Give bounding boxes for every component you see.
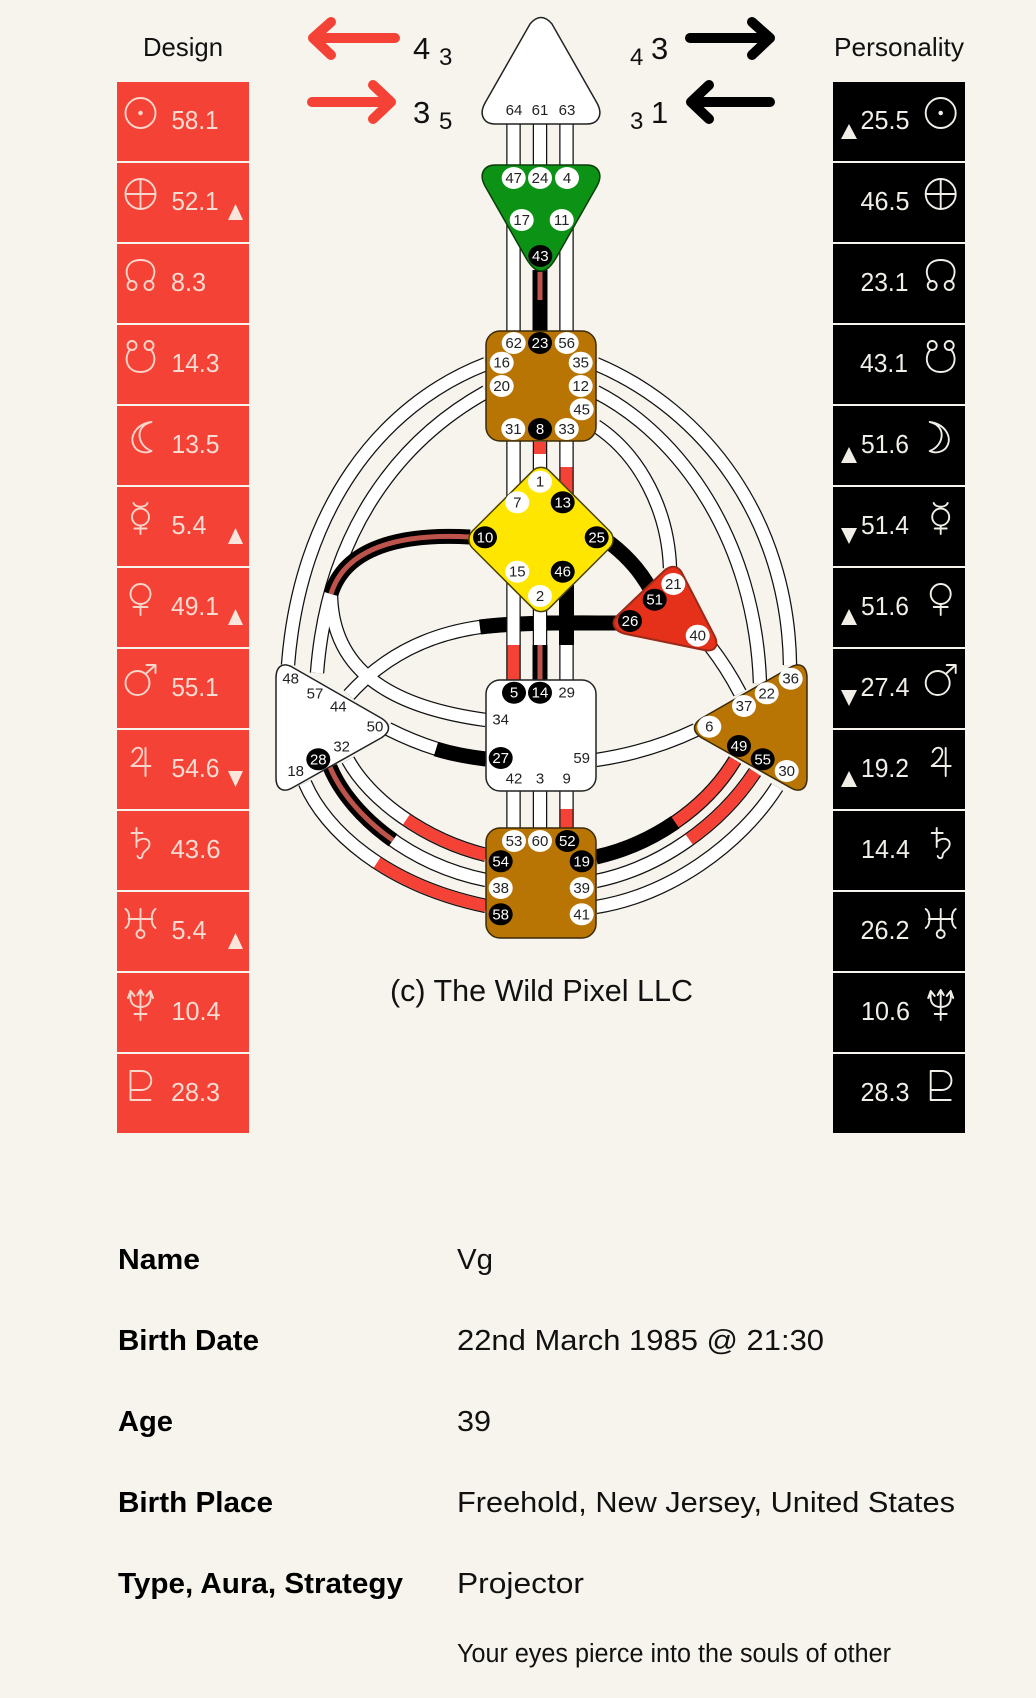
center: spleen: 32 — [333, 739, 350, 756]
center: sacral: 9 — [563, 770, 571, 787]
center: head: 63 — [559, 102, 575, 119]
center: g diamond: 10 — [477, 529, 493, 546]
row: personality sun — [833, 82, 965, 161]
variable numbers: design bottom: 3 — [413, 95, 430, 130]
heading: Personality: Personality — [834, 32, 964, 62]
description text: Your eyes pierce into the souls of other — [457, 1640, 891, 1668]
center: root: 41 — [573, 906, 590, 923]
row: personality mercury: 51.4 — [861, 510, 909, 540]
row: design jupiter: 54.6 — [172, 753, 220, 783]
row: design sun: 58.1 — [172, 105, 218, 135]
row: personality earth — [833, 163, 965, 242]
center: sacral: 5 — [510, 685, 518, 702]
row: design saturn: 43.6 — [170, 834, 220, 864]
center: g diamond — [464, 462, 618, 617]
center: g diamond: 25 — [588, 529, 605, 546]
center: g diamond: 1 — [536, 474, 544, 491]
center: heart: 40 — [689, 628, 706, 645]
row: design venus — [117, 568, 249, 647]
row: personality sun: 25.5 — [860, 105, 910, 135]
panel: design column — [117, 82, 249, 1133]
center: root — [486, 828, 596, 938]
row: design uranus: 5.4 — [172, 915, 206, 945]
row: personality venus: 51.6 — [861, 591, 909, 621]
variable numbers: design top: 4 — [413, 31, 430, 66]
row: design north node: 8.3 — [171, 267, 206, 297]
center: ajna: 11 — [554, 212, 569, 229]
row: age: Age — [118, 1406, 173, 1438]
variable numbers: personality bottom — [630, 95, 668, 135]
center: solar plexus: 22 — [758, 685, 775, 702]
row: birth place: Freehold, New Jersey, United States — [457, 1487, 955, 1519]
center: solar plexus: 37 — [736, 698, 752, 715]
row: personality moon — [833, 406, 965, 485]
row: personality south node: 43.1 — [860, 348, 908, 378]
horizontal black at channel 46 crossing — [547, 616, 610, 630]
channel 43-23 black and red — [532, 270, 548, 331]
center: sacral — [486, 680, 596, 791]
row: birth date — [118, 1325, 824, 1357]
row: design earth — [117, 163, 249, 242]
center: ajna: 43 — [532, 248, 549, 265]
center: solar plexus: 30 — [778, 763, 795, 780]
channel 9-52 red segment — [560, 809, 572, 828]
channel 15-5 red segment — [508, 645, 520, 680]
row: design earth: 52.1 — [172, 186, 218, 216]
center: throat — [486, 331, 596, 441]
row: design mercury — [117, 487, 249, 566]
channel 33-13 red segment — [560, 467, 572, 495]
copyright caption: (c) The Wild Pixel LLC — [390, 973, 693, 1008]
channel 18-58 red segment — [305, 783, 486, 906]
row: personality saturn: 14.4 — [861, 834, 910, 864]
row: design pluto: 28.3 — [171, 1077, 220, 1107]
details table — [118, 1244, 955, 1668]
center: solar plexus: 55 — [754, 751, 771, 768]
row: design moon: 13.5 — [172, 429, 220, 459]
center: root: 60 — [532, 833, 548, 850]
center: throat: 20 — [493, 378, 510, 395]
row: design jupiter — [117, 730, 249, 809]
row: name: Name — [118, 1244, 200, 1276]
center: throat: 16 — [493, 355, 510, 372]
center: spleen: 48 — [282, 671, 299, 688]
center: g diamond: 13 — [554, 494, 571, 511]
center: spleen: 28 — [310, 751, 327, 768]
center: sacral: 34 — [492, 711, 509, 728]
center: ajna — [482, 165, 600, 271]
channel 8-1 red segment — [534, 442, 546, 454]
channel 19-49 black and red — [596, 760, 735, 857]
variable numbers: design top: 3 — [439, 44, 452, 71]
variable numbers: personality top: 3 — [651, 31, 668, 66]
variable numbers: design bottom: 5 — [439, 108, 452, 135]
variable numbers: design top — [413, 31, 452, 71]
center: throat: 23 — [532, 335, 548, 352]
panel: personality column — [833, 82, 965, 1133]
center: head: 64 — [506, 102, 522, 119]
variable numbers: personality top: 4 — [630, 44, 643, 71]
row: age — [118, 1406, 491, 1438]
row: age: 39 — [457, 1406, 491, 1438]
row: design saturn — [117, 811, 249, 890]
row: design pluto — [117, 1054, 249, 1133]
row: name — [118, 1244, 493, 1276]
center: solar plexus — [694, 665, 807, 790]
row: personality pluto: 28.3 — [860, 1077, 910, 1107]
row: personality venus — [833, 568, 965, 647]
row: design moon — [117, 406, 249, 485]
center: throat: 56 — [558, 335, 575, 352]
center: heart: 21 — [665, 576, 682, 593]
center: root: 19 — [573, 853, 590, 870]
variable numbers: design bottom — [413, 95, 452, 135]
center: sacral: 29 — [558, 685, 575, 702]
row: type aura strategy: Type, Aura, Strategy — [118, 1568, 403, 1600]
heading: Design: Design — [143, 32, 223, 62]
center: root: 52 — [559, 833, 576, 850]
center: sacral: 42 — [506, 770, 522, 787]
row: type aura strategy — [118, 1568, 584, 1600]
center: spleen — [276, 665, 388, 790]
center: solar plexus: 49 — [731, 738, 747, 755]
center: sacral: 3 — [536, 770, 544, 787]
channel 2-14 black and red — [532, 645, 548, 680]
row: personality south node — [833, 325, 965, 404]
center: ajna: 4 — [563, 170, 571, 187]
row: personality neptune — [833, 973, 965, 1052]
center: throat: 33 — [558, 421, 575, 438]
row: personality mars — [833, 649, 965, 728]
row: design mercury: 5.4 — [172, 510, 206, 540]
row: birth place: Birth Place — [118, 1487, 273, 1519]
variable numbers: personality top — [630, 31, 668, 71]
row: design venus: 49.1 — [171, 591, 219, 621]
row: personality neptune: 10.6 — [861, 996, 910, 1026]
row: personality uranus — [833, 892, 965, 971]
row: personality jupiter — [833, 730, 965, 809]
row: design neptune — [117, 973, 249, 1052]
row: personality moon: 51.6 — [861, 429, 909, 459]
curved channel fills — [288, 364, 790, 907]
center: ajna: 17 — [513, 212, 530, 229]
row: design mars: 55.1 — [172, 672, 218, 702]
center: root: 38 — [492, 880, 509, 897]
center: head — [482, 18, 600, 124]
center: g diamond: 2 — [536, 588, 544, 605]
row: birth date: 22nd March 1985 @ 21:30 — [457, 1325, 824, 1357]
channel 32-54 red segment — [348, 760, 486, 855]
center: throat: 8 — [536, 421, 544, 438]
channel 27-50 active black — [436, 749, 486, 759]
channel 25-51 active black — [603, 538, 652, 592]
row: personality mars: 27.4 — [860, 672, 910, 702]
center: throat: 62 — [505, 335, 522, 352]
row: design south node: 14.3 — [172, 348, 220, 378]
arrow: personality bottom black left — [691, 85, 770, 119]
row: design mars — [117, 649, 249, 728]
center: spleen: 44 — [330, 699, 347, 716]
row: personality mercury — [833, 487, 965, 566]
center: throat: 31 — [505, 421, 522, 438]
row: design south node — [117, 325, 249, 404]
channel 28-38 active black and red — [330, 767, 486, 880]
row: design neptune: 10.4 — [172, 996, 220, 1026]
center: spleen: 57 — [307, 685, 323, 702]
center: sacral: 59 — [573, 750, 590, 767]
center: heart: 51 — [646, 592, 663, 609]
center: root: 39 — [573, 880, 590, 897]
row: birth date: Birth Date — [118, 1325, 259, 1357]
row: design sun — [117, 82, 249, 161]
row: personality saturn — [833, 811, 965, 890]
row: personality earth: 46.5 — [860, 186, 910, 216]
row: personality jupiter: 19.2 — [861, 753, 909, 783]
bodygraph channels — [288, 124, 790, 907]
center: throat: 12 — [572, 378, 589, 395]
row: personality north node — [833, 244, 965, 323]
row: design north node — [117, 244, 249, 323]
center: solar plexus: 36 — [782, 671, 799, 688]
center: heart — [614, 567, 716, 650]
center: root: 58 — [492, 906, 509, 923]
center: g diamond: 15 — [509, 564, 526, 581]
center: spleen: 50 — [367, 719, 383, 736]
center: sacral: 14 — [532, 685, 548, 702]
row: type aura strategy: Projector — [457, 1568, 584, 1600]
center: throat: 35 — [572, 355, 589, 372]
row: personality uranus: 26.2 — [860, 915, 910, 945]
center: throat: 45 — [573, 401, 590, 418]
center: head: 61 — [532, 102, 548, 119]
arrow: design top red left — [313, 22, 395, 55]
center: ajna: 47 — [505, 170, 522, 187]
center: heart: 26 — [622, 613, 638, 630]
center: g diamond: 46 — [554, 564, 571, 581]
arrow: personality top black right — [690, 22, 770, 55]
channel 10 active black and red — [331, 536, 470, 594]
channel 46-29 black segment — [559, 585, 574, 645]
curved channel outlines — [288, 364, 790, 907]
row: personality pluto — [833, 1054, 965, 1133]
arrow: design bottom red right — [312, 85, 391, 119]
row: design uranus — [117, 892, 249, 971]
variable numbers: personality bottom: 1 — [651, 95, 668, 130]
center: root: 54 — [492, 853, 509, 870]
center: sacral: 27 — [492, 750, 509, 767]
center: spleen: 18 — [287, 763, 304, 780]
row: personality north node: 23.1 — [860, 267, 908, 297]
row: name: Vg — [457, 1244, 493, 1276]
center: solar plexus: 6 — [705, 719, 713, 736]
variable numbers: personality bottom: 3 — [630, 108, 643, 135]
vertical channels — [514, 124, 610, 828]
channel 39-55 red segment — [596, 772, 755, 881]
center: ajna: 24 — [532, 170, 548, 187]
channel 26-44 active black — [480, 623, 620, 627]
row: birth place — [118, 1487, 955, 1519]
center: root: 53 — [506, 833, 522, 850]
center: g diamond: 7 — [513, 494, 521, 511]
